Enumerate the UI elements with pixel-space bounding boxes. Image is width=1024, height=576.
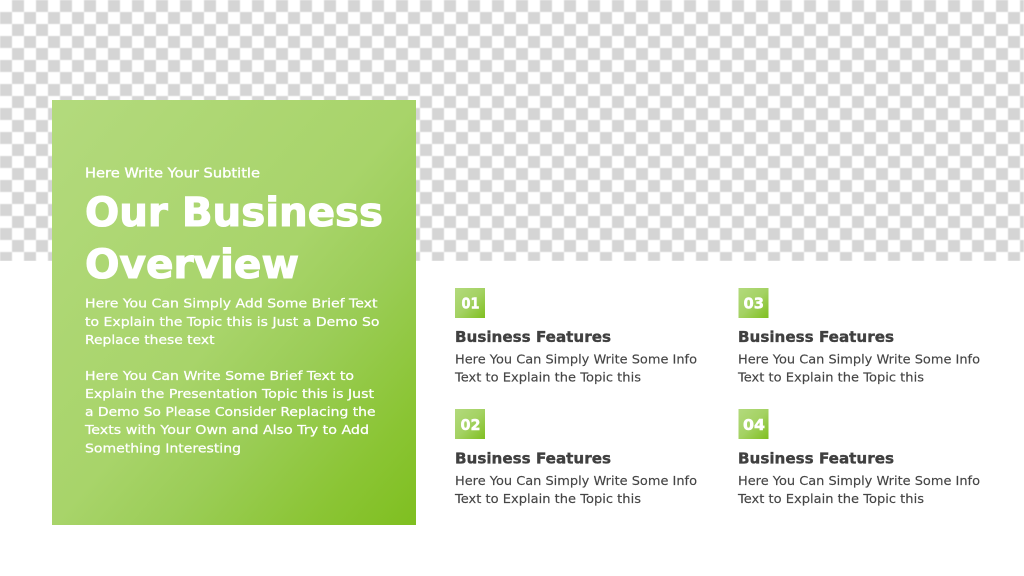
number badge 01 xyxy=(455,288,485,318)
first paragraph: Replace these text xyxy=(85,332,215,347)
feature 01 description: Here You Can Simply Write Some Info xyxy=(455,352,697,366)
number badge 04: 04 xyxy=(743,416,765,434)
feature 04 description: Here You Can Simply Write Some Info xyxy=(738,473,980,488)
feature 01 description: Text to Explain the Topic this xyxy=(454,370,641,385)
feature 04 heading: Business Features xyxy=(738,450,894,468)
feature 03 description: Here You Can Simply Write Some Info xyxy=(738,352,980,366)
number badge 02: 02 xyxy=(460,416,480,434)
second paragraph xyxy=(84,368,376,456)
feature 02 xyxy=(454,409,697,506)
subtitle: Here Write Your Subtitle xyxy=(85,166,260,182)
feature 03 description: Text to Explain the Topic this xyxy=(737,370,924,385)
transparency checkerboard background xyxy=(0,0,1024,261)
feature 01 heading: Business Features xyxy=(455,328,611,346)
feature 02 description: Text to Explain the Topic this xyxy=(454,491,641,506)
second paragraph: Texts with Your Own and Also Try to Add xyxy=(84,422,369,437)
feature 02 heading: Business Features xyxy=(455,450,611,468)
number badge 03: 03 xyxy=(744,294,764,312)
title xyxy=(85,190,383,288)
first paragraph: Here You Can Simply Add Some Brief Text xyxy=(85,296,378,310)
feature 03 heading: Business Features xyxy=(738,328,894,346)
panel: business overview xyxy=(52,100,416,525)
feature 04 xyxy=(737,409,980,506)
second paragraph: Something Interesting xyxy=(85,440,241,456)
number badge 04 xyxy=(738,409,768,439)
second paragraph: Here You Can Write Some Brief Text to xyxy=(85,368,354,383)
feature 04 description xyxy=(737,473,980,506)
feature 02 description xyxy=(454,473,697,506)
feature 01 xyxy=(454,288,697,385)
second paragraph: a Demo So Please Consider Replacing the xyxy=(85,404,376,419)
number badge 03 xyxy=(738,288,768,318)
feature 03 description xyxy=(737,352,980,385)
first paragraph: to Explain the Topic this is Just a Demo So xyxy=(85,314,380,329)
title: Overview xyxy=(85,242,299,288)
feature 04 description: Text to Explain the Topic this xyxy=(737,491,924,506)
second paragraph: Explain the Presentation Topic this is Just xyxy=(85,386,374,401)
feature 03 xyxy=(737,288,980,385)
title: Our Business xyxy=(85,190,383,236)
first paragraph xyxy=(85,296,380,347)
feature 02 description: Here You Can Simply Write Some Info xyxy=(455,473,697,488)
feature 01 description xyxy=(454,352,697,385)
number badge 02 xyxy=(455,409,485,439)
number badge 01: 01 xyxy=(462,294,480,312)
